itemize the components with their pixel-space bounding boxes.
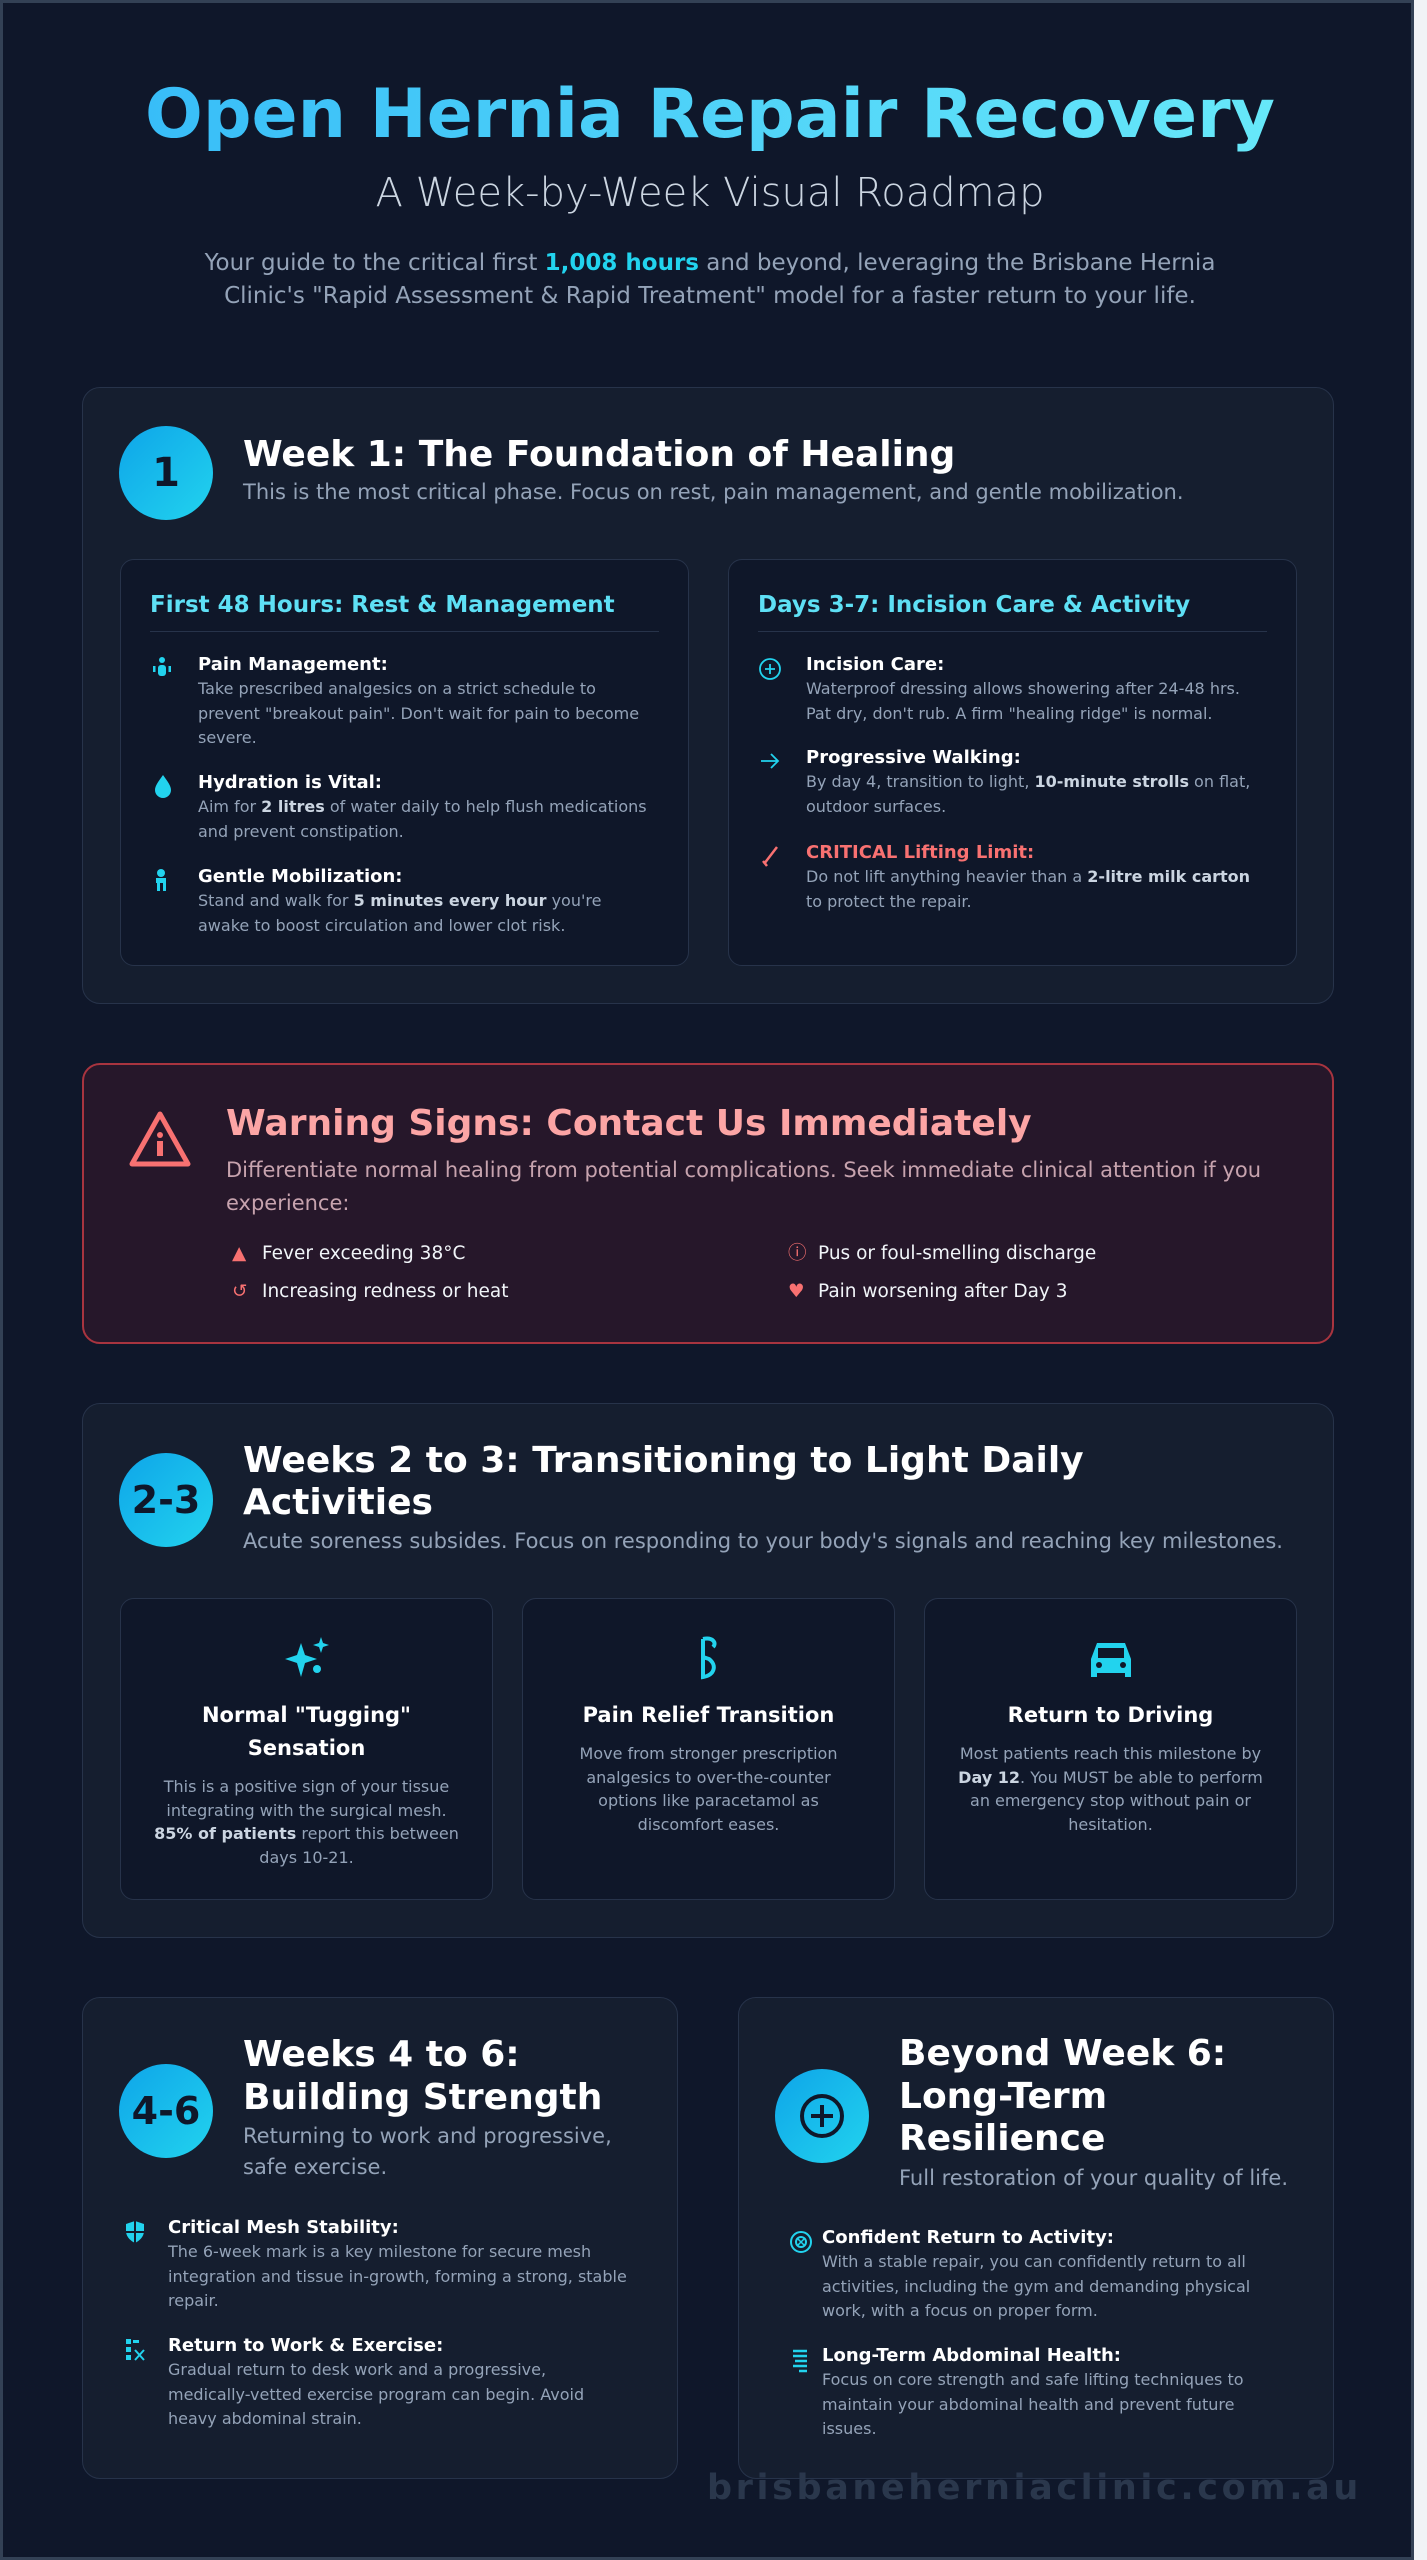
heading: beyond week 6 — [899, 2033, 1226, 2159]
watermark: brisbaneherniaclinic.com.au — [707, 2468, 1362, 2508]
item: hydration — [198, 772, 647, 840]
sign: pus: ⓘ — [788, 1243, 807, 1264]
card: tugging: Sensation — [248, 1736, 365, 1760]
icon: target — [790, 2231, 812, 2253]
icon: plus circle — [759, 658, 781, 680]
panel: weeks 4-6 — [82, 1997, 678, 2479]
sign: pain: Pain worsening after Day 3 — [818, 1281, 1068, 1302]
card: driving: Most patients reach this milestone by Day 12. You MUST be able to perform an emergency stop without pain or hesitation. — [958, 1744, 1263, 1834]
item: mobilization — [198, 866, 601, 934]
card: pain relief: Pain Relief Transition — [583, 1703, 834, 1727]
item: mesh stability: Critical Mesh Stability: — [168, 2217, 399, 2238]
icon: person — [153, 657, 171, 676]
sign: redness: ↺ — [232, 1281, 248, 1302]
item: lifting limit: CRITICAL Lifting Limit: — [806, 842, 1034, 863]
badge: 1 — [119, 426, 213, 520]
badge: 2-3 — [119, 1453, 213, 1547]
warning description: Differentiate normal healing from potential complications. Seek immediate clinical attention if you experience: — [226, 1158, 1261, 1215]
item: walking: By day 4, transition to light, 10-minute strolls on flat, outdoor surfaces. — [806, 772, 1250, 816]
item: pain management: Pain Management: — [198, 654, 388, 675]
heading: beyond week 6: Long-Term — [899, 2076, 1107, 2116]
card heading: Days 3-7: Incision Care & Activity — [758, 592, 1190, 618]
heading: week 1: Week 1: The Foundation of Healing — [243, 434, 955, 475]
subheading: weeks 2-3: Acute soreness subsides. Focus on responding to your body's signals and reaching key milestones. — [243, 1529, 1283, 1553]
badge: plus — [775, 2069, 869, 2163]
sign: redness: Increasing redness or heat — [262, 1281, 508, 1302]
subtitle: A Week-by-Week Visual Roadmap — [376, 170, 1044, 216]
card: first 48 hours — [120, 559, 689, 966]
icon: pill — [701, 1636, 716, 1680]
item: incision care — [806, 654, 1240, 722]
item: walking — [806, 747, 1250, 816]
icon: water drop — [155, 775, 171, 798]
card: driving: Return to Driving — [1008, 1703, 1213, 1727]
subheading: beyond week 6: Full restoration of your quality of life. — [899, 2166, 1288, 2190]
item: incision care: Incision Care: — [806, 654, 944, 675]
title: Open Hernia Repair Recovery — [145, 75, 1275, 154]
intro text: Clinic's "Rapid Assessment & Rapid Treatment" model for a faster return to your life. — [224, 283, 1196, 309]
item: mesh stability: The 6-week mark is a key milestone for secure mesh integration and tissue in-growth, forming a strong, stable repair. — [168, 2242, 627, 2310]
item: return to work: Gradual return to desk work and a progressive, medically-vetted exercise program can begin. Avoid heavy abdominal strain. — [168, 2360, 584, 2428]
icon: dumbbell — [793, 2350, 807, 2372]
panel: beyond week 6 — [738, 1997, 1334, 2479]
badge: 4-6 — [119, 2064, 213, 2158]
item: walking: Progressive Walking: — [806, 747, 1021, 768]
icon: arrow — [761, 753, 780, 769]
item: confident return: With a stable repair, you can confidently return to all activities, including the gym and demanding physical work, with a focus on proper form. — [822, 2252, 1250, 2320]
intro text: Your guide to the critical first 1,008 hours and beyond, leveraging the Brisbane Hernia — [205, 250, 1215, 276]
heading: weeks 4-6 — [243, 2034, 602, 2118]
card: tugging: This is a positive sign of your tissue integrating with the surgical mesh. — [164, 1777, 449, 1820]
heading: warning: Warning Signs: Contact Us Immediately — [226, 1103, 1032, 1144]
card: tugging: Normal "Tugging" — [202, 1703, 411, 1727]
item: pain management: Take prescribed analgesics on a strict schedule to prevent "breakout pain". Don't wait for pain to become severe. — [198, 679, 639, 747]
subheading: weeks 4-6 — [243, 2124, 612, 2179]
item: mobilization: Gentle Mobilization: — [198, 866, 402, 887]
subheading: week 1: This is the most critical phase. Focus on rest, pain management, and gentle mobilization. — [243, 480, 1184, 504]
heading: beyond week 6: Resilience — [899, 2118, 1105, 2159]
panel: warning signs — [82, 1063, 1334, 1344]
item: lifting limit: Do not lift anything heavier than a 2-litre milk carton — [806, 867, 1250, 886]
icon: warning triangle — [130, 1112, 190, 1166]
sign: fever: Fever exceeding 38°C — [262, 1243, 465, 1264]
sign: pain: ♥ — [788, 1281, 805, 1302]
subheading: weeks 4-6: safe exercise. — [243, 2155, 387, 2179]
item: confident return: Confident Return to Activity: — [822, 2227, 1114, 2248]
item: abdominal health: Focus on core strength and safe lifting techniques to maintain your abdominal health and prevent future issues. — [822, 2370, 1244, 2438]
item: abdominal health: Long-Term Abdominal Health: — [822, 2345, 1121, 2366]
item: return to work: Return to Work & Exercise: — [168, 2335, 443, 2356]
badge: 4-6: 4-6 — [132, 2089, 200, 2133]
panel: week 1 — [82, 387, 1334, 1004]
panel: weeks 2-3 — [82, 1403, 1334, 1938]
heading: weeks 4-6: Weeks 4 to 6: — [243, 2034, 520, 2075]
card: pain relief — [522, 1598, 895, 1900]
icon: warning slash — [762, 846, 778, 867]
icon: car — [1091, 1643, 1131, 1677]
item: lifting limit — [806, 842, 1250, 910]
item: incision care: Waterproof dressing allows showering after 24-48 hrs. — [806, 679, 1240, 698]
item: hydration: Aim for 2 litres of water daily to help flush medications and prevent constipation. — [198, 797, 647, 840]
heading: weeks 4-6: Building Strength — [243, 2077, 602, 2118]
badge: 2-3: 2-3 — [132, 1478, 200, 1522]
card heading: First 48 Hours: Rest & Management — [150, 592, 615, 618]
card: tugging — [120, 1598, 493, 1900]
icon: sparkles — [285, 1637, 329, 1677]
badge: 1: 1 — [152, 450, 180, 496]
sign: pus: Pus or foul-smelling discharge — [818, 1243, 1096, 1264]
subheading: weeks 4-6: Returning to work and progressive, — [243, 2124, 612, 2148]
icon: walking — [156, 869, 166, 891]
intro text — [204, 250, 1215, 309]
card: pain relief: Move from stronger prescription analgesics to over-the-counter options like paracetamol as discomfort eases. — [580, 1744, 837, 1834]
card: days 3-7 — [728, 559, 1297, 966]
icon: checklist — [126, 2339, 145, 2361]
heading: beyond week 6: Beyond Week 6: — [899, 2033, 1226, 2074]
card: driving — [924, 1598, 1297, 1900]
sign: fever: ▲ — [232, 1243, 246, 1264]
item: incision care: Pat dry, don't rub. A firm "healing ridge" is normal. — [806, 704, 1212, 722]
item: lifting limit: to protect the repair. — [806, 892, 972, 910]
card: tugging: 85% of patients report this between days 10-21. — [154, 1824, 459, 1866]
list: warning signs — [232, 1242, 1096, 1302]
icon: shield — [126, 2221, 144, 2242]
item: hydration: Hydration is Vital: — [198, 772, 382, 793]
heading: weeks 2-3: Weeks 2 to 3: Transitioning to Light Daily Activities — [243, 1440, 1084, 1523]
item: mobilization: Stand and walk for 5 minutes every hour you're awake to boost circulation and lower clot risk. — [198, 891, 601, 934]
